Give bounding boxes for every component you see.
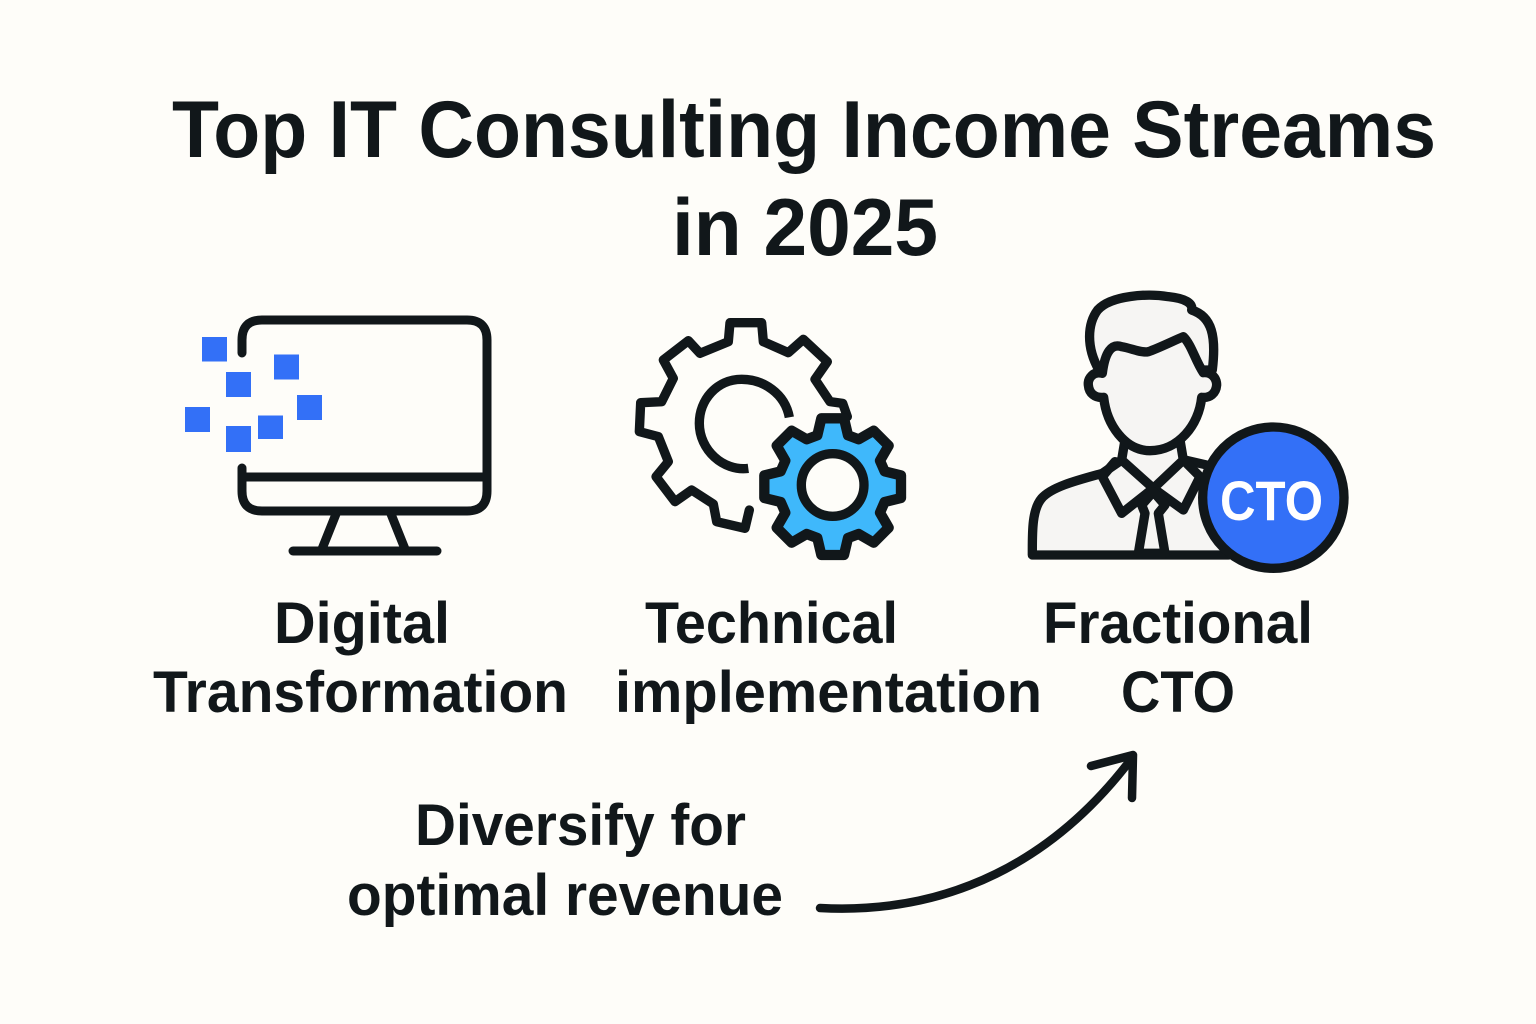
arrow xyxy=(820,755,1133,909)
small blue gear xyxy=(764,418,901,555)
icon: gears xyxy=(639,323,901,555)
label: Technical implementation: implementation xyxy=(615,660,1042,725)
large outline gear xyxy=(639,323,847,528)
label: Digital Transformation: Transformation xyxy=(153,660,568,725)
title xyxy=(172,85,1436,273)
label: Digital Transformation xyxy=(153,591,568,725)
person figure xyxy=(1032,295,1228,555)
label: Technical implementation: Technical xyxy=(645,591,898,656)
label: Fractional CTO: CTO xyxy=(1121,660,1235,725)
CTO badge xyxy=(1203,427,1344,568)
label: Technical implementation xyxy=(615,591,1042,725)
callout text: Diversify for xyxy=(415,793,746,858)
label: Digital Transformation: Digital xyxy=(274,591,450,656)
title: Top IT Consulting Income Streams xyxy=(172,85,1436,175)
callout text: optimal revenue xyxy=(347,863,783,928)
icon: fractional CTO person with badge xyxy=(1032,295,1344,568)
CTO badge label: CTO xyxy=(1220,469,1323,532)
callout text xyxy=(347,793,783,928)
icon: monitor with digital pixels xyxy=(185,320,487,551)
title: in 2025 xyxy=(672,183,938,273)
label: Fractional CTO: Fractional xyxy=(1043,591,1313,656)
label: Fractional CTO xyxy=(1043,591,1313,725)
